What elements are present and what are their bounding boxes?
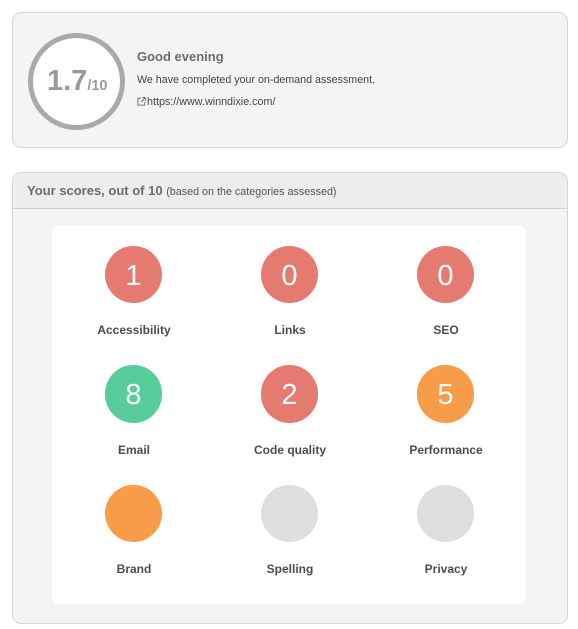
score: Email — [105, 365, 162, 457]
score: Links — [261, 246, 318, 337]
score: SEO — [417, 246, 474, 337]
heading text: Your scores, out of 10 (based on the categories assessed) — [27, 183, 336, 198]
greeting heading: Good evening — [137, 49, 224, 64]
score: SEO: 0 — [437, 260, 453, 292]
site link: https://www.winndixie.com/ — [147, 96, 275, 108]
score: Spelling: Spelling — [267, 562, 313, 576]
score: Brand: Brand — [117, 562, 151, 576]
panel heading — [13, 173, 567, 209]
score: Accessibility — [97, 246, 171, 337]
assessment message: We have completed your on-demand assessment. — [137, 74, 375, 86]
score: Email: Email — [118, 443, 150, 457]
score: Links: 0 — [281, 260, 297, 292]
score: Links: Links — [274, 323, 306, 337]
score: Code quality: 2 — [281, 379, 297, 411]
score: Performance — [409, 365, 483, 457]
score: Email: 8 — [125, 379, 141, 411]
panel: category scores — [12, 172, 568, 624]
score: Accessibility: Accessibility — [97, 323, 171, 337]
score: SEO: SEO — [433, 323, 459, 337]
score ring — [28, 33, 125, 130]
score: Code quality — [254, 365, 326, 457]
score: Performance: Performance — [409, 443, 483, 457]
score: Performance: 5 — [437, 379, 453, 411]
score grid card — [52, 226, 526, 604]
score: Brand — [105, 485, 162, 576]
overall score: 1.7/10 — [47, 65, 108, 97]
icon: external link — [138, 97, 146, 106]
score: Privacy — [417, 485, 474, 576]
score: Accessibility: 1 — [125, 260, 141, 292]
score: Privacy: Privacy — [425, 562, 467, 576]
panel: overall assessment — [12, 12, 568, 148]
score: Spelling — [261, 485, 318, 576]
score: Code quality: Code quality — [254, 443, 326, 457]
